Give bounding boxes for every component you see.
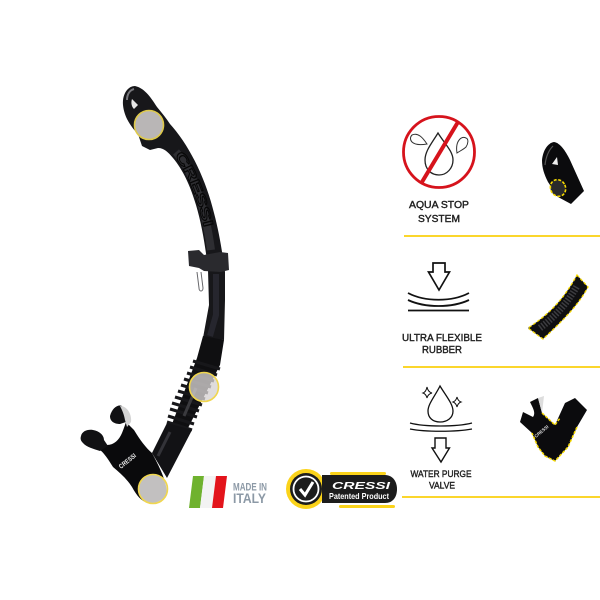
mouthpiece left bite tab (81, 430, 108, 451)
snorkel top opening highlight (131, 99, 138, 109)
top yellow bar (330, 472, 386, 475)
label: ultra flexible rubber: ULTRA FLEXIBLE (402, 333, 482, 344)
label: ultra flexible rubber (402, 333, 482, 356)
panel: ultra flexible rubber (402, 263, 600, 368)
label: aqua stop system: SYSTEM (418, 214, 460, 225)
snorkel upper tube (123, 86, 225, 340)
lower tube shine (210, 274, 216, 336)
strap clip (188, 250, 229, 291)
tube highlight (176, 152, 211, 250)
lower tube gloss (158, 432, 170, 456)
icon: down arrow pressing on lines (408, 263, 469, 310)
callout circle bottom (138, 474, 168, 504)
divider line (403, 366, 600, 368)
product detail: mouthpiece (520, 396, 587, 461)
Italy text: ITALY (233, 490, 267, 506)
mouthpiece upper bite tab (110, 405, 126, 424)
panel: water purge valve (402, 386, 600, 498)
label: water purge valve: WATER PURGE (410, 469, 472, 479)
label: aqua stop system: AQUA STOP (409, 200, 469, 211)
bottom yellow bar (339, 505, 395, 508)
black disc (290, 473, 322, 505)
corrugated flexible section (167, 336, 224, 430)
product detail: snorkel top (542, 142, 584, 204)
label: ultra flexible rubber: RUBBER (422, 345, 462, 356)
product detail: corrugated tube (528, 275, 588, 339)
mouthpiece logo: CRESSI (118, 452, 138, 471)
divider line (404, 235, 600, 237)
icon: drop over lines with arrow (410, 386, 472, 462)
Italian flag (189, 476, 227, 508)
divider line (402, 496, 600, 498)
label: water purge valve (410, 469, 472, 490)
mouthpiece body (100, 422, 167, 503)
yellow dashed outline (532, 413, 577, 461)
snorkel head gloss (127, 89, 134, 100)
made in text: MADE IN (233, 482, 267, 494)
CRESSI lettering on tube: CRESSI (176, 152, 214, 227)
product detail: mouthpiece: CRESSI (533, 424, 549, 439)
black pill (322, 475, 397, 503)
label: aqua stop system (409, 200, 469, 225)
patented product text: Patented Product (329, 491, 389, 501)
made in Italy badge (189, 476, 267, 508)
panel: aqua stop system (404, 116, 600, 237)
lower tube (152, 423, 192, 478)
Cressi wordmark: CRESSI (332, 481, 390, 492)
Cressi patented product badge (286, 469, 397, 509)
rib gloss (184, 388, 196, 416)
white ring with check mark (294, 476, 318, 502)
yellow ring (286, 469, 326, 509)
snorkel product photo (80, 86, 229, 504)
label: water purge valve: VALVE (429, 480, 455, 490)
icon: no water drops (404, 116, 474, 188)
callout circle top (134, 110, 164, 140)
mouthpiece white edge (120, 406, 131, 427)
callout circle middle (190, 372, 218, 402)
